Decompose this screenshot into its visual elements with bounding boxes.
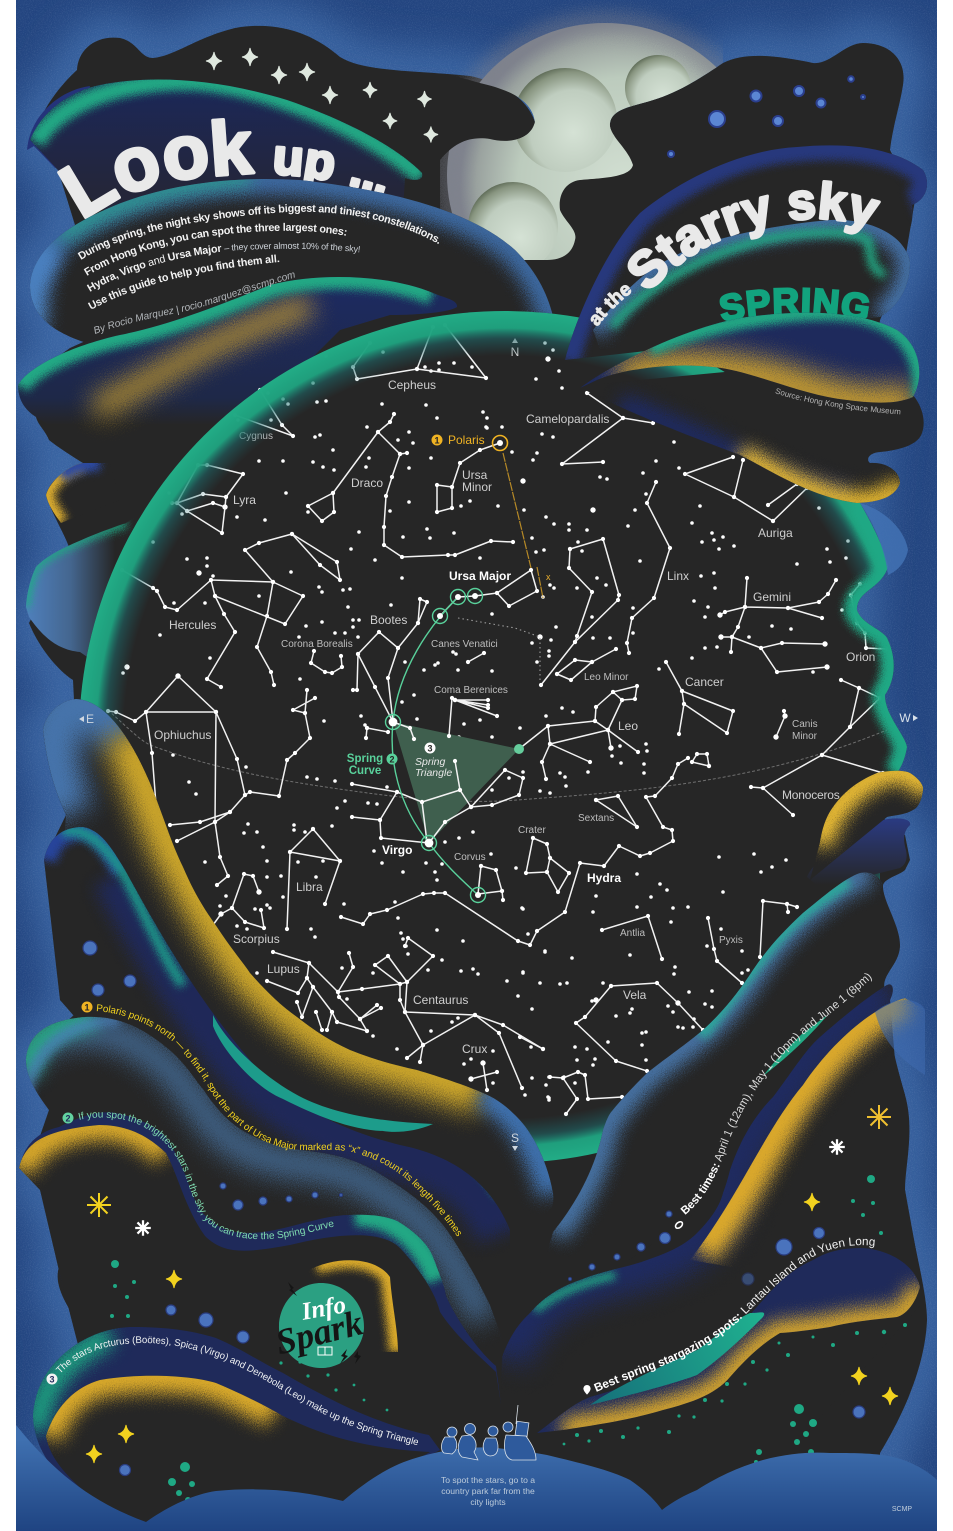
Spring Triangle label: 3 [427, 744, 433, 754]
Spring Curve label: 2 [389, 754, 395, 764]
subtitle: at the Starry sky: Starry sky [628, 180, 881, 288]
note 2: Spring Curve: If you spot the brightest stars in the sky, you can trace the Spring Curve [78, 1112, 334, 1240]
intro text: Use this guide to help you find them all. [88, 254, 280, 309]
Spring Triangle label: Triangle [415, 767, 452, 779]
wave: yellow crescent lower left [46, 1376, 430, 1522]
subtitle: at the Starry sky: at the [590, 285, 632, 326]
wave: yellow dome right [807, 770, 924, 879]
note 1: Polaris: Polaris points north — to find it, spot the part of Ursa Major marked as “x” and count its length five times [96, 1004, 461, 1236]
caption: country park: To spot the stars, go to a [441, 1475, 535, 1485]
constellation labels: Cygnus [239, 431, 273, 442]
Spring Curve label [347, 753, 398, 777]
star field: background stars [123, 343, 848, 1100]
star chart disc [86, 312, 907, 776]
wave: small yellow bubble left [46, 463, 108, 523]
constellation labels: Bootes [370, 613, 407, 627]
constellation labels: Crater [518, 825, 546, 836]
intro text: Hydra, Virgo and Ursa Major – they cover almost 10% of the sky! [86, 242, 360, 292]
constellation labels: Canes Venatici [431, 639, 498, 650]
chart ring [79, 311, 931, 1163]
intro text [78, 204, 440, 309]
Spring Triangle label: Spring [415, 756, 446, 768]
caption: country park [441, 1475, 535, 1507]
constellation labels: Centaurus [413, 993, 468, 1007]
constellation labels: Monoceros [782, 788, 840, 802]
bottom hills [16, 1425, 937, 1531]
constellation labels: Pyxis [719, 935, 743, 946]
wave: yellow dome under Spring Curve text [19, 1125, 501, 1420]
constellation labels: Auriga [758, 526, 793, 540]
wave: Spring Triangle text wave [33, 1327, 440, 1488]
byline: By Rocio Marquez | rocio.marquez@scmp.com [94, 272, 295, 334]
SCMP credit: SCMP [892, 1506, 912, 1513]
Spring Curve label: Spring [347, 753, 383, 765]
compass: west: W [899, 711, 911, 725]
highlighted labels: Hydra [587, 871, 621, 885]
intro text: From Hong Kong, you can spot the three largest ones: [84, 222, 347, 276]
constellation labels: Canis [792, 719, 818, 730]
constellation labels: Linx [667, 569, 689, 583]
source credit: Source: Hong Kong Space Museum [776, 388, 900, 414]
sparkle stars top left [206, 48, 438, 143]
decorative yellow and white stars [86, 1105, 898, 1463]
constellation labels: Gemini [753, 590, 791, 604]
intro text: During spring, the night sky shows off its biggest and tiniest constellations. [78, 204, 440, 260]
constellation labels: Antlia [620, 928, 645, 939]
highlighted labels: x [546, 572, 551, 582]
wave: spring navy yellow [580, 312, 920, 403]
note 3: Spring Triangle: 3 [49, 1374, 55, 1384]
title: Look up: Look up... [57, 118, 386, 219]
best spots: Best spring stargazing spots: Lantau Island and Yuen Long [594, 1238, 875, 1392]
Spring Curve label: Curve [349, 765, 381, 777]
constellation labels [154, 378, 875, 1056]
constellation labels: Lyra [233, 493, 256, 507]
yellow wave behind badge [316, 1259, 398, 1352]
Info Spark badge: Info [298, 1291, 348, 1326]
Polaris marker [492, 436, 508, 450]
season label: SPRING: SPRING [720, 287, 870, 321]
spring triangle [393, 722, 519, 843]
constellation lines [108, 325, 888, 1114]
decorative dots: blue [83, 941, 865, 1476]
wave: upper left green [27, 80, 422, 210]
Spring Triangle label [415, 742, 452, 779]
constellation labels: Coma Berenices [434, 685, 508, 696]
wave: top right navy [565, 145, 928, 360]
Polaris label: 1 [434, 436, 440, 446]
constellation labels: Corvus [454, 852, 486, 863]
wave: intro text blue [30, 179, 552, 342]
constellation labels: Minor [792, 731, 818, 742]
constellation labels: Ursa [462, 468, 488, 482]
constellation labels: Libra [296, 880, 323, 894]
illustration: people stargazing [441, 1405, 536, 1460]
highlighted labels [382, 569, 621, 885]
constellation labels: Scorpius [233, 932, 280, 946]
caption: country park: country park far from the [441, 1486, 535, 1496]
constellation labels: Leo Minor [584, 672, 629, 683]
dotted line Ursa Major to Leo [458, 618, 540, 680]
best times: Best times: April 1 (12am), May 1 (10pm) and June 1 (8pm) [680, 973, 872, 1215]
note 1: Polaris: 1 [84, 1002, 90, 1012]
key star highlights [389, 440, 524, 898]
wave: Polaris text wave [26, 1016, 500, 1342]
constellation labels: Ophiuchus [154, 728, 211, 742]
constellation labels: Crux [462, 1042, 487, 1056]
constellation labels: Cancer [685, 675, 724, 689]
compass: west [899, 711, 918, 725]
constellation labels: Lupus [267, 962, 300, 976]
wave: green and yellow lower left of title [18, 277, 457, 436]
wave: navy yellow lower right with teal crescent [537, 1248, 920, 1433]
Info Spark badge [272, 1282, 367, 1368]
wave: navy understory with green crescents [44, 827, 510, 1251]
compass: north: N [511, 345, 519, 359]
note 2: Spring Curve: 2 [65, 1114, 71, 1124]
Polaris label: Polaris [448, 433, 485, 447]
blue dots top right [668, 76, 865, 157]
Polaris label [432, 433, 485, 447]
compass: north [511, 338, 519, 359]
wave: blue dome lower right [550, 872, 896, 1253]
compass: south: S [511, 1131, 519, 1145]
constellation labels: Leo [618, 719, 638, 733]
wave: Spring Curve text wave [22, 1112, 501, 1403]
compass: east: E [86, 712, 94, 726]
constellation labels: Minor [462, 480, 492, 494]
wave: navy yellow right [502, 984, 925, 1381]
highlighted labels: Ursa Major [449, 569, 511, 583]
compass: east [79, 712, 94, 726]
note 3: Spring Triangle: The stars Arcturus (Boötes), Spica (Virgo) and Denebola (Leo) make up the Spring Triangle [56, 1336, 418, 1445]
constellation labels: Cepheus [388, 378, 436, 392]
Info Spark badge: Spark [272, 1302, 367, 1362]
highlighted labels: Virgo [382, 843, 412, 857]
caption: country park: city lights [470, 1497, 506, 1507]
wave: big yellow band lower left [43, 699, 554, 1213]
constellation labels: Draco [351, 476, 383, 490]
wave: left blue behind chart [26, 520, 133, 656]
decorative dots: green [110, 1175, 907, 1514]
wave: source panel [586, 372, 924, 503]
spring curve [386, 588, 486, 902]
wave: top right blue and green [593, 220, 910, 348]
ecliptic dashed line [108, 710, 887, 801]
star field: brighter stars [127, 359, 827, 1079]
constellation labels: Corona Borealis [281, 639, 353, 650]
constellation labels: Camelopardalis [526, 412, 609, 426]
constellation labels: Hercules [169, 618, 216, 632]
constellation labels: Vela [623, 988, 647, 1002]
constellation labels: Sextans [578, 813, 614, 824]
dashed measuring line to Polaris [503, 453, 543, 598]
translucent blue wave at right of chart [860, 503, 908, 575]
constellation labels: Orion [846, 650, 875, 664]
moon with craters [440, 0, 723, 260]
